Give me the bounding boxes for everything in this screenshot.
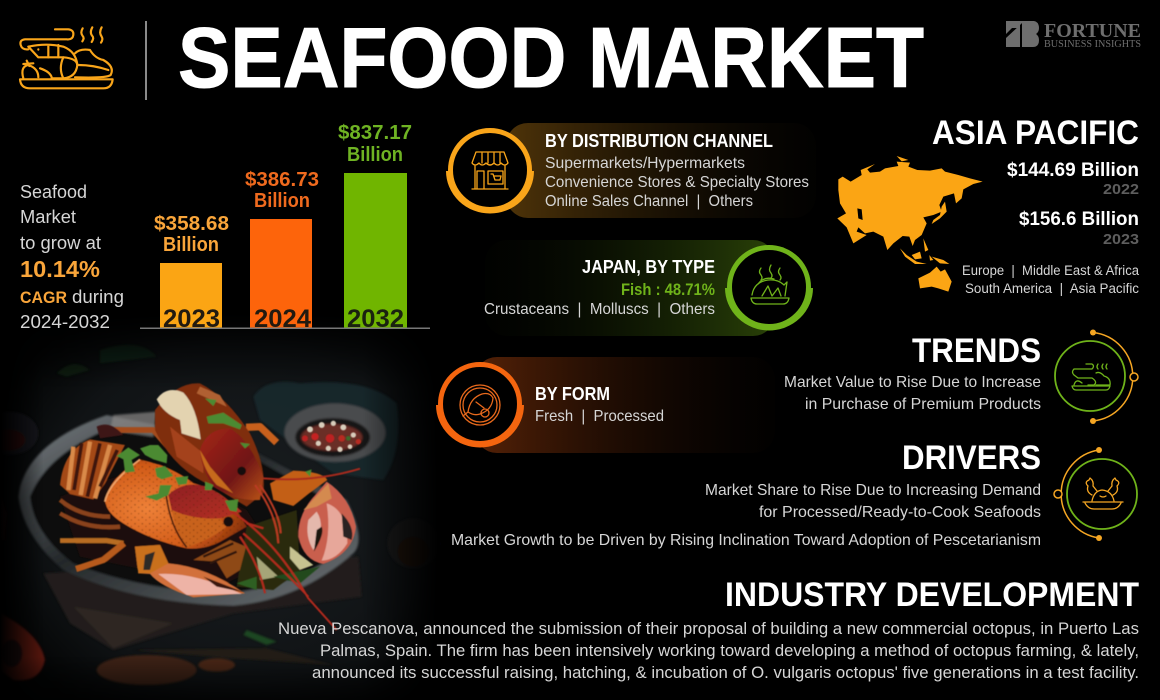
panel: by distribution channel (449, 123, 816, 218)
bar chart (140, 122, 430, 333)
panel: Asia Pacific figures: South America | Asia Pacific (965, 281, 1139, 296)
parsley (117, 398, 312, 512)
panel: drivers: Market Share to Rise Due to Increasing Demand (705, 482, 1041, 499)
bar 2032 (338, 122, 412, 333)
panel: by form (439, 357, 775, 453)
front legs (60, 500, 120, 527)
panel: by form: Fresh | Processed (535, 408, 664, 425)
divider (145, 21, 147, 100)
panel: drivers: Market Growth to be Driven by Rising Inclination Toward Adoption of Pescetarianism (451, 532, 1041, 549)
panel: trends (784, 330, 1138, 424)
panel: trends: TRENDS (912, 332, 1041, 370)
panel: Asia Pacific figures (932, 114, 1139, 296)
header icon: seafood plate (20, 27, 113, 88)
growth text: 2024-2032 (20, 311, 110, 332)
panel: Asia Pacific figures: $144.69 Billion (1007, 160, 1139, 181)
panel: drivers: for Processed/Ready-to-Cook Seafoods (759, 504, 1041, 521)
panel: trends: in Purchase of Premium Products (805, 396, 1041, 413)
panel: Asia Pacific figures: ASIA PACIFIC (932, 114, 1139, 152)
panel: by distribution channel: Convenience Stores & Specialty Stores (545, 174, 809, 191)
growth text: during (72, 286, 124, 307)
icon: store (449, 130, 531, 210)
panel: industry development (278, 576, 1139, 682)
bowl relish (302, 421, 361, 452)
bar 2024: Billion (254, 190, 310, 212)
growth text: Market (20, 206, 76, 227)
growth text: Seafood (20, 181, 87, 202)
bar 2032: Billion (347, 144, 403, 166)
logo: Fortune Business Insights (1006, 20, 1141, 50)
front carapace (105, 459, 247, 549)
bar 2023: $358.68 (154, 213, 229, 235)
bar 2032: 2032 (347, 305, 404, 333)
panel: Japan by type: Crustaceans | Molluscs | Others (484, 301, 715, 318)
map: Asia Pacific (837, 156, 983, 292)
bar 2032: $837.17 (338, 122, 412, 144)
panel: industry development: INDUSTRY DEVELOPMENT (725, 576, 1139, 614)
front claw (135, 545, 245, 597)
sauce and garnish (237, 510, 300, 590)
panel: Asia Pacific figures: Europe | Middle East & Africa (962, 263, 1139, 278)
bar 2024: 2024 (254, 305, 311, 333)
panel: drivers: DRIVERS (902, 439, 1041, 477)
panel: Asia Pacific figures: 2022 (1103, 182, 1139, 198)
lobsters (60, 383, 360, 630)
back lobster (155, 383, 264, 507)
panel: industry development: Nueva Pescanova, announced the submission of their proposal of building a new commercial octopus, in Puerto Las (278, 619, 1139, 638)
antennae (263, 469, 360, 479)
bar 2024 (245, 169, 319, 333)
icon: fish on plate (439, 364, 521, 445)
logo: Fortune Business Insights: BUSINESS INSIGHTS (1044, 39, 1141, 50)
icon: drivers badge (1054, 447, 1137, 541)
warm shadow beneath lobsters (60, 463, 277, 583)
icon: trends badge (1055, 330, 1138, 424)
growth text (20, 181, 124, 332)
mouth parts (193, 540, 246, 578)
bar 2023: 2023 (163, 305, 220, 333)
panel: drivers (451, 439, 1137, 549)
panel: by distribution channel: Online Sales Channel | Others (545, 193, 753, 210)
title: SEAFOOD MARKET (178, 11, 924, 106)
panel: Asia Pacific figures: $156.6 Billion (1019, 209, 1139, 230)
logo: Fortune Business Insights: FORTUNE (1044, 20, 1141, 42)
bar 2023 (154, 213, 229, 333)
growth text: to grow at (20, 232, 101, 253)
bar 2023: Billion (163, 234, 219, 256)
photo: lobsters on a plate (0, 310, 440, 700)
panel: by form: BY FORM (535, 384, 610, 404)
back legs (100, 430, 168, 447)
front tail (60, 439, 125, 499)
growth text: 10.14% (20, 256, 100, 282)
growth text: CAGR (20, 288, 67, 307)
bar 2024: $386.73 (245, 169, 319, 191)
panel: Asia Pacific figures: 2023 (1103, 232, 1139, 248)
panel: Japan by type (484, 240, 810, 336)
panel: industry development: Palmas, Spain. The firm has been intensively working toward developing a method of octopus farming, & lately, (320, 641, 1139, 660)
wrist and right claw (270, 471, 327, 506)
panel: Japan by type: Fish : 48.71% (621, 281, 715, 299)
foreground table items (0, 493, 333, 685)
panel: industry development: announced its successful raising, hatching, & incubation of O. vulgaris octopus' five generations in a test facility. (312, 663, 1139, 682)
panel: Japan by type: JAPAN, BY TYPE (582, 257, 715, 277)
icon: cooked fish (728, 248, 810, 327)
panel: by distribution channel: Supermarkets/Hypermarkets (545, 155, 745, 172)
panel: by distribution channel: BY DISTRIBUTION CHANNEL (545, 131, 773, 151)
panel: trends: Market Value to Rise Due to Increase (784, 374, 1041, 391)
